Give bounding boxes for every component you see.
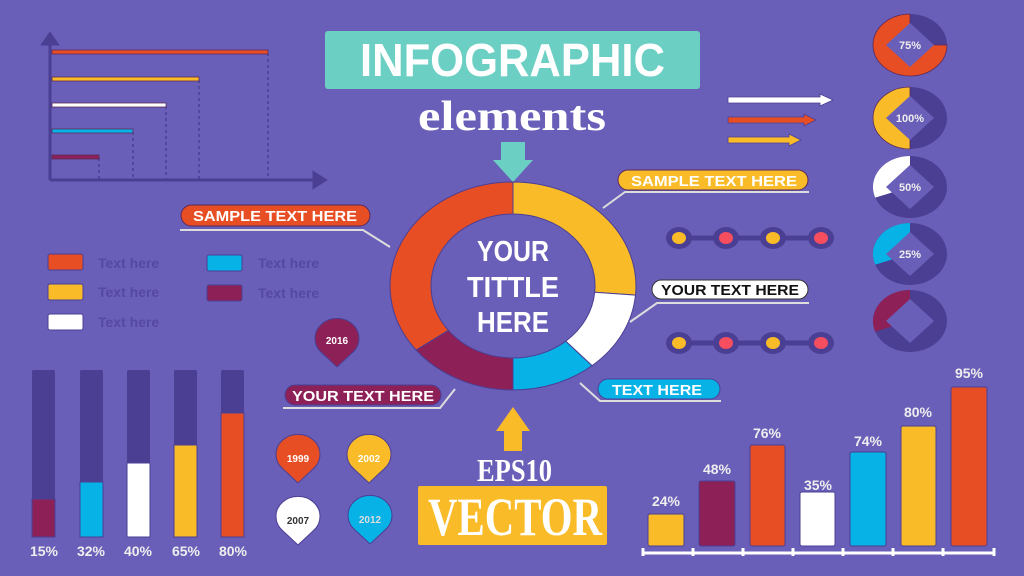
- label: cyan text here: [580, 379, 721, 401]
- legend: [48, 254, 319, 330]
- vertical progress bars: 40%: [124, 543, 153, 559]
- eps10: EPS10: [477, 452, 552, 488]
- pie charts: 100%: [896, 113, 924, 125]
- vertical progress bars: [30, 370, 248, 559]
- arrow: up yellow: [496, 407, 530, 451]
- pins: 2012: [359, 515, 382, 526]
- donut title: YOUR: [477, 236, 549, 268]
- label: magenta your text: [283, 385, 455, 408]
- legend: Text here: [258, 255, 319, 271]
- pie charts: 25%: [899, 249, 921, 261]
- label: yellow sample text: SAMPLE TEXT HERE: [631, 173, 797, 190]
- pins: 2007: [287, 516, 310, 527]
- label: white your text: YOUR TEXT HERE: [661, 282, 799, 299]
- horizontal bar chart: [43, 34, 325, 187]
- pins: 2016: [326, 336, 349, 347]
- label: orange sample text: SAMPLE TEXT HERE: [193, 208, 357, 225]
- column chart: 74%: [854, 433, 883, 449]
- column chart: 24%: [652, 493, 681, 509]
- pie charts: [873, 14, 947, 352]
- legend: Text here: [258, 285, 319, 301]
- vertical progress bars: 80%: [219, 543, 248, 559]
- donut chart: [390, 182, 636, 390]
- column chart: 48%: [703, 461, 732, 477]
- legend: Text here: [98, 314, 159, 330]
- label: white your text: [630, 280, 809, 322]
- pie charts: 50%: [899, 182, 921, 194]
- pins: 2002: [358, 454, 381, 465]
- label: orange sample text: [180, 205, 390, 247]
- column chart: 80%: [904, 404, 933, 420]
- column chart: 95%: [955, 365, 984, 381]
- vertical progress bars: 15%: [30, 543, 59, 559]
- column chart: 76%: [753, 425, 782, 441]
- column chart: [643, 365, 994, 556]
- legend: Text here: [98, 284, 159, 300]
- legend: Text here: [98, 255, 159, 271]
- label: cyan text here: TEXT HERE: [612, 382, 702, 399]
- arrow: down teal: [493, 142, 533, 182]
- pins: 1999: [287, 454, 310, 465]
- label: yellow sample text: [603, 170, 809, 208]
- dot chains: [666, 227, 834, 354]
- pins: [276, 318, 392, 545]
- arrows right: [728, 94, 833, 146]
- vertical progress bars: 32%: [77, 543, 106, 559]
- subtitle: elements: [418, 94, 606, 140]
- column chart: 35%: [804, 477, 833, 493]
- vertical progress bars: 65%: [172, 543, 201, 559]
- vector badge: VECTOR: [428, 487, 603, 547]
- pie charts: 75%: [899, 40, 921, 52]
- label: magenta your text: YOUR TEXT HERE: [292, 388, 434, 405]
- title: INFOGRAPHIC: [360, 34, 665, 86]
- donut chart: TITTLE: [467, 272, 559, 304]
- donut chart: HERE: [477, 307, 549, 339]
